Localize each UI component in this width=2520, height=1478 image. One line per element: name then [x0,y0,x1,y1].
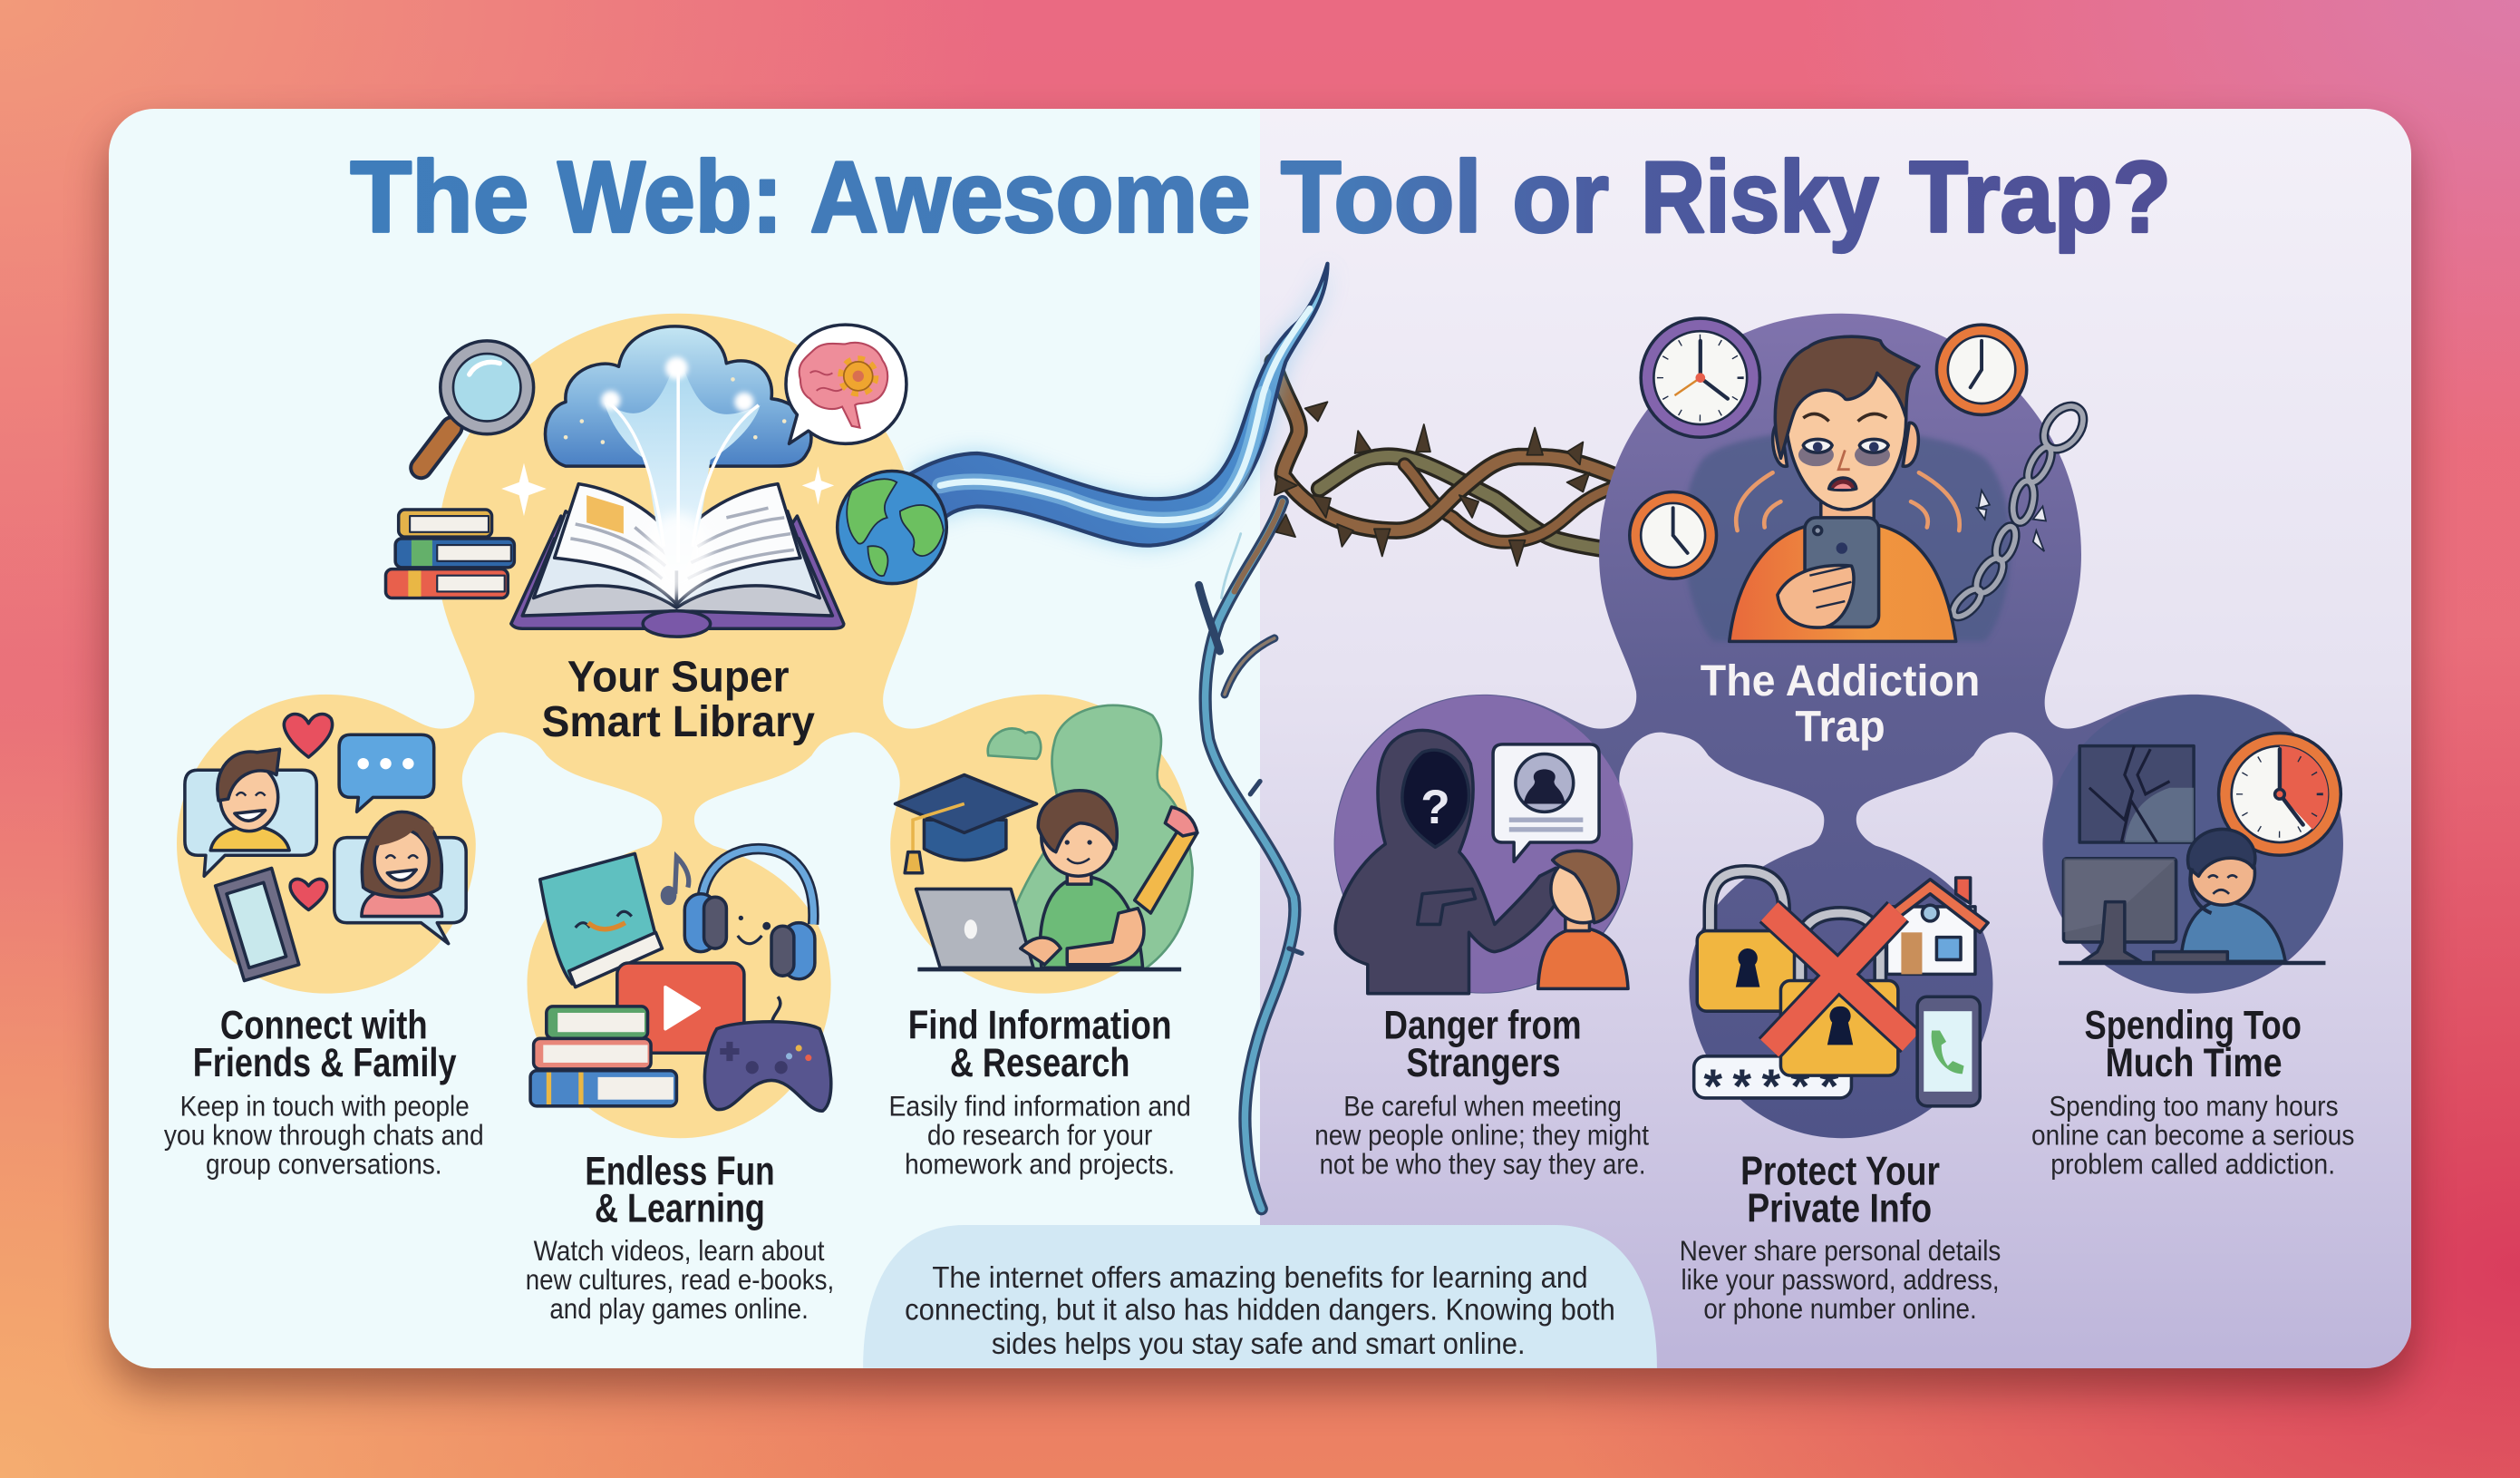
text: protect your private info: Private Info [1747,1186,1932,1230]
icon: clock orange top [1936,325,2027,414]
text: endless fun and learning: & Learning [595,1186,765,1230]
text: connect with friends and family: group conversations. [206,1148,442,1180]
lighter purple tint, strangers circle [1334,695,1632,993]
text: the addiction trap [1701,657,1980,751]
text: endless fun and learning: new cultures, read e-books, [526,1264,834,1296]
darker tint, time circle [2045,695,2342,993]
icon: stranger in a hood: ? [1420,781,1450,834]
icon: stack of books [386,510,514,598]
text: danger from strangers: new people online; they might [1314,1119,1649,1151]
text: spending too much time: Spending Too [2085,1003,2302,1047]
text: find information and research: & Research [950,1041,1129,1085]
title: Tool [1281,140,1482,253]
text: spending too much time: online can become a serious [2031,1119,2354,1151]
callout: summary: sides helps you stay safe and smart online. [992,1327,1526,1361]
text: the addiction trap: Trap [1795,703,1885,751]
text: connect with friends and family: Friends & Family [193,1041,457,1085]
title: Awesome [810,140,1250,253]
icon: locks, house, phone and password: ***** [1703,1060,1839,1113]
text: connect with friends and family: Connect with [220,1003,428,1047]
arrow: glowing blue stream [909,264,1327,545]
text: your super smart library: Smart Library [541,698,815,746]
text: danger from strangers: Be careful when meeting [1343,1090,1622,1122]
text: your super smart library [541,653,815,746]
text: protect your private info: like your password, address, [1682,1264,2000,1296]
icon: stranger in a hood [1335,730,1628,994]
text: protect your private info: Protect Your [1740,1149,1940,1193]
text: endless fun and learning [526,1149,834,1325]
icon: open book [511,484,844,637]
panel: card background [109,109,2411,1368]
icon: fun and learning collection [530,849,831,1111]
title: Web: [557,140,782,253]
thorny stem dividing the two sides [1199,501,1302,1209]
icon: sparkles [501,463,834,516]
icon: friends and family chat [185,714,466,981]
text: spending too much time: problem called addiction. [2050,1148,2335,1180]
text: protect your private info: or phone number online. [1703,1293,1977,1325]
title [351,140,2171,253]
text: danger from strangers: not be who they say they are. [1320,1148,1646,1180]
text: find information and research: homework and projects. [905,1148,1175,1180]
text: endless fun and learning: Watch videos, learn about [534,1235,825,1267]
text: find information and research: do research for your [927,1119,1152,1151]
darker backdrop behind the addicted user [1683,431,2011,641]
icon: broken chain [1949,399,2091,621]
text: the addiction trap: The Addiction [1701,657,1980,705]
text: protect your private info: Never share personal details [1680,1235,2001,1267]
icon: magnifying glass [422,341,534,468]
title: Risky [1641,140,1879,253]
text: danger from strangers: Strangers [1406,1041,1561,1085]
icon: time loss scene [2059,733,2341,963]
icon: locks, house, phone and password [1694,871,1988,1113]
text: spending too much time: Spending too many hours [2050,1090,2339,1122]
text: protect your private info [1680,1149,2001,1325]
text: find information and research [888,1003,1191,1180]
icon: tired boy with phone [1730,336,1960,641]
text: danger from strangers [1314,1003,1649,1180]
title: or [1512,140,1609,253]
title: Trap? [1909,140,2171,253]
text: your super smart library: Your Super [567,653,790,701]
text: connect with friends and family: you know through chats and [164,1119,484,1151]
callout: summary: The internet offers amazing benefits for learning and [932,1261,1588,1295]
icon: research student [896,705,1197,969]
text: endless fun and learning: and play games online. [549,1293,809,1325]
text: connect with friends and family: Keep in touch with people [180,1090,470,1122]
panel: yellow benefits blob [177,314,1191,1138]
text: spending too much time [2031,1003,2354,1180]
text: spending too much time: Much Time [2106,1041,2283,1085]
text: find information and research: Easily find information and [888,1090,1191,1122]
panel: purple dangers blob [1334,314,2343,1138]
text: find information and research: Find Information [908,1003,1171,1047]
icon: brain speech bubble [786,325,906,443]
icon: clock purple [1641,318,1759,437]
text: danger from strangers: Danger from [1384,1003,1582,1047]
icon: globe [838,471,946,584]
icon: knowledge cloud [545,326,811,466]
icon: light fountain rising from the book [601,357,761,597]
thorny vines [1273,362,1647,566]
callout: summary [863,1225,1657,1368]
title: The [351,140,528,253]
icon: clock orange lower [1630,492,1717,579]
text: connect with friends and family [164,1003,484,1180]
callout: summary: connecting, but it also has hidden dangers. Knowing both [905,1294,1615,1327]
text: endless fun and learning: Endless Fun [585,1149,775,1193]
